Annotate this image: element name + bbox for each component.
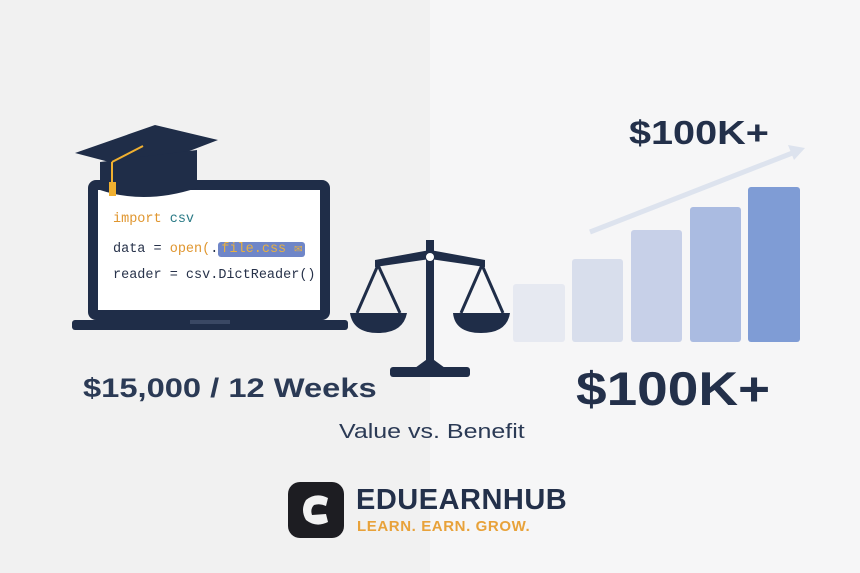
graduation cap (75, 125, 218, 170)
laptop with code: data = open(.file.css ✉ (113, 242, 302, 257)
laptop with code: import csv (113, 212, 194, 227)
bar chart with arrow (513, 145, 805, 342)
heading: benefit: $100K+ (576, 362, 770, 415)
heading: top value: $100K+ (629, 114, 769, 151)
caption: Value vs. Benefit (339, 421, 525, 443)
laptop with code: reader = csv.DictReader() (113, 268, 316, 283)
logo: EDUEARNHUB (356, 484, 567, 516)
icon: scale (350, 240, 510, 377)
logo (288, 482, 567, 538)
icon: logo (288, 482, 344, 538)
laptop with code (72, 125, 348, 330)
heading: cost: $15,000 / 12 Weeks (83, 373, 377, 403)
logo: LEARN. EARN. GROW. (357, 518, 530, 535)
